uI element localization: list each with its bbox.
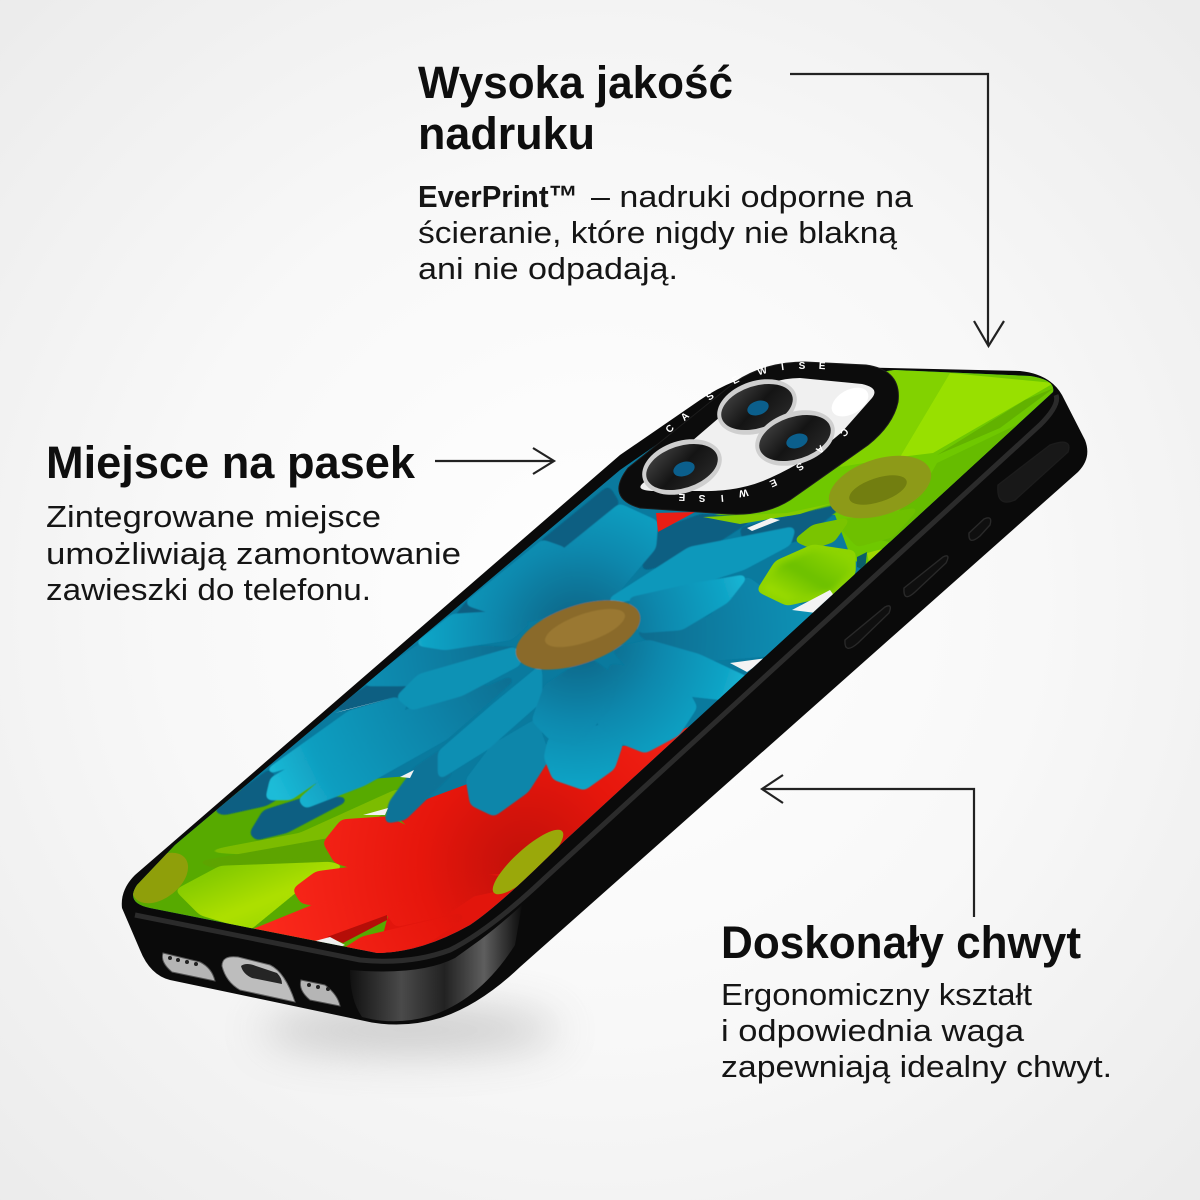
brand ring top: C	[664, 423, 677, 436]
printed flower screen	[120, 360, 1080, 965]
brand ring bottom: A	[813, 442, 826, 455]
text block: grip: i odpowiednia waga	[721, 1013, 1025, 1048]
text block: grip: zapewniają idealny chwyt.	[721, 1049, 1112, 1084]
arrow: strap slot	[435, 448, 554, 474]
text block: strap slot: zawieszki do telefonu.	[46, 572, 371, 607]
side buttons	[845, 442, 1069, 648]
glossy corner	[350, 905, 522, 1021]
brand ring bottom	[678, 425, 850, 503]
phone case body	[122, 366, 1087, 1025]
green flower: top lower petals	[703, 444, 939, 603]
text block: strap slot	[46, 499, 461, 607]
heading: print quality: Wysoka jakość	[418, 57, 733, 108]
heading: print quality: nadruku	[418, 108, 595, 159]
text block: grip	[721, 977, 1112, 1084]
text block: print quality: EverPrint™	[418, 179, 578, 214]
white background gaps	[335, 518, 835, 815]
text block: strap slot: Zintegrowane miejsce	[46, 499, 381, 534]
red flower	[253, 730, 690, 965]
brand ring bottom: E	[678, 491, 685, 502]
brand ring top: W	[756, 365, 769, 378]
brand ring bottom: W	[737, 486, 749, 499]
text block: print quality	[418, 179, 914, 286]
lens left	[635, 430, 729, 504]
brand ring top: E	[730, 374, 742, 387]
brand ring bottom: C	[837, 425, 850, 438]
speaker right	[300, 980, 340, 1006]
phone	[120, 360, 1087, 1025]
camera plate	[640, 378, 874, 491]
brand ring top	[664, 361, 826, 436]
brand ring bottom: I	[720, 492, 724, 503]
green flower: bottom left	[120, 775, 440, 950]
flash	[827, 382, 873, 422]
brand ring bottom: S	[698, 492, 705, 503]
brand ring top: A	[679, 411, 692, 424]
lens right	[748, 401, 842, 475]
text block: print quality: – nadruki odporne na	[591, 179, 914, 214]
shadow under phone	[260, 1008, 560, 1052]
brand ring bottom: S	[793, 460, 805, 473]
heading: grip: Doskonały chwyt	[721, 917, 1081, 968]
brand ring top: I	[781, 362, 785, 373]
green flower: top base	[713, 370, 1054, 568]
heading: strap slot: Miejsce na pasek	[46, 437, 416, 488]
lens top	[710, 370, 804, 444]
arrow: print quality	[790, 74, 1004, 346]
text block: grip: Ergonomiczny kształt	[721, 977, 1032, 1012]
camera island	[619, 361, 898, 514]
text block: print quality: ani nie odpadają.	[418, 251, 678, 286]
text block: print quality: ścieranie, które nigdy nie blakną	[418, 215, 898, 250]
brand ring bottom: E	[767, 476, 778, 489]
blue flower	[218, 490, 836, 837]
brand ring top: S	[799, 361, 806, 372]
camera frame	[619, 362, 898, 514]
arrow: grip	[762, 775, 974, 917]
text block: strap slot: umożliwiają zamontowanie	[46, 536, 461, 571]
red sliver by camera	[656, 512, 695, 532]
case side highlight edge	[135, 395, 1057, 961]
usb port	[222, 957, 295, 1002]
brand ring top: S	[704, 390, 717, 403]
heading: print quality	[418, 57, 733, 159]
brand ring top: E	[819, 361, 826, 372]
speaker left	[162, 953, 215, 981]
